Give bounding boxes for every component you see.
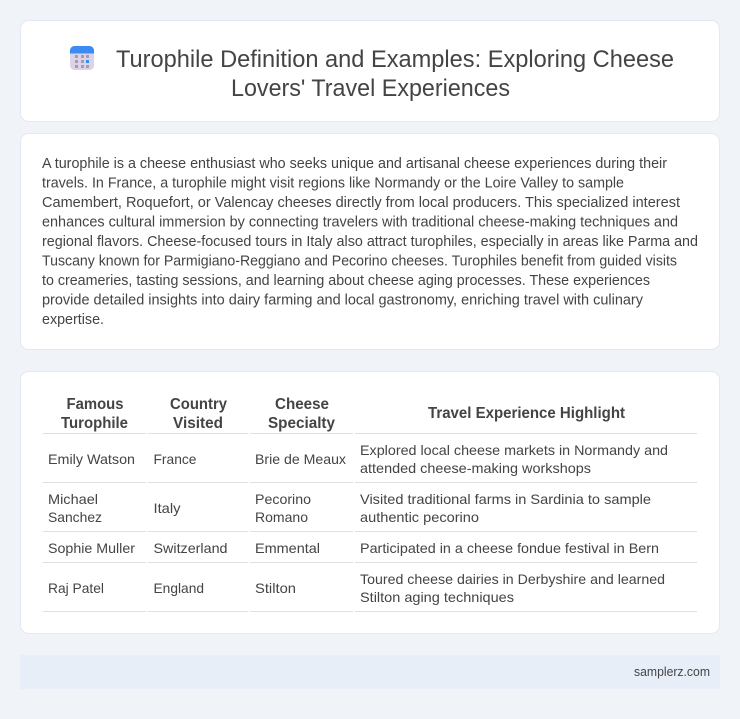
text block: definition paragraph: travels. In France, a turophile might visit regions like Normandy or the Loire Valley to sample [42, 176, 624, 192]
footer text: samplerz.com [634, 665, 710, 679]
table header [61, 396, 626, 432]
table header: Country [170, 396, 227, 413]
table rules [43, 433, 697, 612]
table row: Sophie Muller: Participated in a cheese fondue festival in Bern [360, 541, 659, 556]
table row: Sophie Muller: Emmental [255, 541, 320, 556]
table row: Raj Patel: Stilton aging techniques [360, 590, 514, 605]
title [116, 46, 674, 102]
panel: title card [20, 20, 720, 122]
text block: definition paragraph: regional flavors. Cheese-focused tours in Italy also attract turophiles, especially in areas like Parma and [42, 234, 698, 250]
text block: definition paragraph: to creameries, tasting sessions, and learning about cheese aging processes. These experiences [42, 273, 650, 289]
table row: Raj Patel: England [154, 581, 204, 596]
table header: Turophile [61, 415, 128, 432]
table row: Michael Sanchez: Michael [48, 492, 98, 507]
table row: Emily Watson [48, 443, 668, 476]
table row: Michael Sanchez: Sanchez [48, 510, 102, 525]
table row: Emily Watson: Brie de Meaux [255, 452, 346, 467]
table row: Emily Watson: Emily Watson [48, 452, 135, 467]
text block: definition paragraph: expertise. [42, 312, 104, 328]
table row: Emily Watson: France [154, 452, 197, 467]
table header: Famous [66, 396, 124, 413]
table row: Sophie Muller: Sophie Muller [48, 541, 135, 556]
table row: Raj Patel [48, 572, 665, 605]
text block: definition paragraph: provide detailed insights into dairy farming and local gastronomy, enriching travel with culinary [42, 292, 644, 308]
table row: Raj Patel: Raj Patel [48, 581, 104, 596]
panel: table card [20, 372, 720, 634]
table header: Travel Experience Highlight [428, 405, 626, 422]
title: Lovers' Travel Experiences [231, 75, 510, 102]
table row: Emily Watson: Explored local cheese markets in Normandy and [360, 443, 668, 458]
table header: Cheese [275, 396, 329, 413]
table row: Sophie Muller: Switzerland [154, 541, 228, 556]
table row: Sophie Muller [48, 541, 659, 556]
table row: Michael Sanchez: Visited traditional farms in Sardinia to sample [360, 492, 651, 507]
table row: Michael Sanchez: Italy [154, 501, 181, 516]
text block: definition paragraph: A turophile is a cheese enthusiast who seeks unique and artisanal cheese experiences during their [42, 156, 667, 172]
table row: Michael Sanchez: Romano [255, 510, 308, 525]
text block: definition paragraph: enhances cultural immersion by connecting travelers with traditional cheese-making techniques and [42, 214, 678, 230]
table header: Visited [173, 415, 223, 432]
table row: Emily Watson: attended cheese-making workshops [360, 461, 591, 476]
footer bar [20, 655, 720, 689]
table row: Michael Sanchez: authentic pecorino [360, 510, 479, 525]
title: Turophile Definition and Examples: Exploring Cheese [116, 46, 674, 73]
table row: Michael Sanchez: Pecorino [255, 492, 311, 507]
panel: definition text [20, 134, 720, 350]
icon: calendar [70, 46, 94, 70]
table row: Michael Sanchez [48, 492, 651, 525]
table row: Raj Patel: Toured cheese dairies in Derbyshire and learned [360, 572, 665, 587]
text block: definition paragraph: Camembert, Roquefort, or Valencay cheeses directly from local producers. This specialized interest [42, 195, 680, 211]
text block: definition paragraph [42, 156, 698, 328]
table header: Specialty [268, 415, 335, 432]
table row: Raj Patel: Stilton [255, 581, 296, 596]
text block: definition paragraph: Tuscany known for Parmigiano-Reggiano and Pecorino cheeses. Turophiles benefit from guided visits [42, 254, 677, 270]
